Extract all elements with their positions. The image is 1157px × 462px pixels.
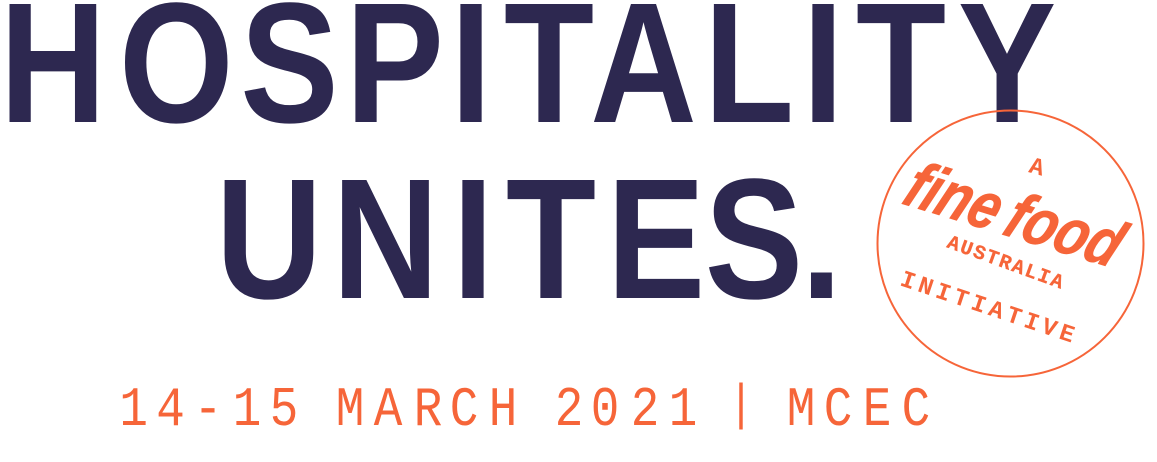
title: second line: UNITES.: [216, 143, 842, 334]
date and venue: 14-15 MARCH 2021: [119, 379, 697, 442]
badge text: Australia: AUSTRALIA: [944, 232, 1066, 295]
badge circle: [878, 110, 1144, 376]
date and venue: |: [728, 377, 754, 434]
badge: fine food australia initiative: [878, 110, 1144, 376]
badge text: Initiative: INITIATIVE: [896, 267, 1078, 350]
badge text: A: A: [1026, 154, 1047, 184]
badge text: fine food: fine food: [894, 148, 1138, 281]
date and venue: MCEC: [787, 379, 930, 442]
